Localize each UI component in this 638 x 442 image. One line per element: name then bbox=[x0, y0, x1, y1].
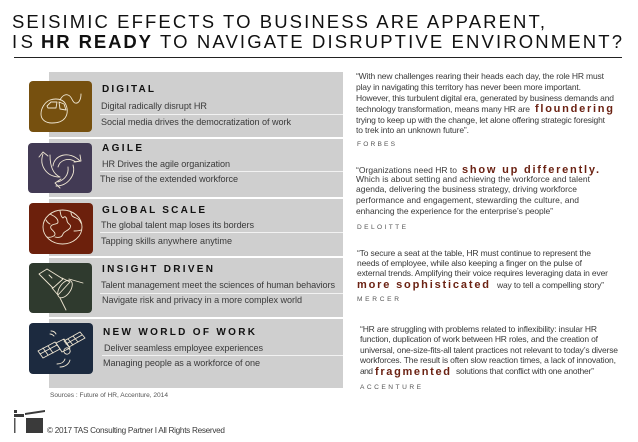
panel: agile bbox=[28, 139, 343, 197]
text: insight driven bbox=[101, 264, 335, 305]
text: global scale: GLOBAL SCALE bbox=[102, 205, 205, 216]
quote: mercer: more sophisticated bbox=[357, 279, 489, 291]
quote: mercer: “To secure a seat at the table, HR must continue to represent the bbox=[357, 248, 591, 258]
quote: forbes: technology transformation, means many HR are bbox=[356, 104, 530, 114]
panel: new world of work bbox=[29, 319, 343, 388]
text: global scale: The global talent map loses its borders bbox=[101, 220, 254, 230]
quote: deloitte: Which is about setting and achieving the workforce and talent bbox=[356, 174, 591, 184]
quote: forbes: to trek into an unknown future”. bbox=[356, 125, 469, 135]
quote: deloitte: agenda, delivering the business strategy, driving workforce bbox=[356, 184, 577, 194]
quote: forbes: play in navigating this territory has never been more important. bbox=[356, 82, 581, 92]
title: TO NAVIGATE DISRUPTIVE ENVIRONMENT? bbox=[160, 31, 622, 52]
icon: telescope bbox=[29, 263, 92, 313]
text: new world of work: NEW WORLD OF WORK bbox=[103, 327, 256, 338]
quote: accenture: and bbox=[360, 366, 373, 376]
text: agile: The rise of the extended workforce bbox=[100, 174, 238, 184]
panel: digital bbox=[29, 72, 343, 137]
quote: accenture: “HR are struggling with problems related to inflexibility: insular HR bbox=[360, 324, 597, 334]
quote: accenture: solutions that conflict with one another” bbox=[456, 366, 594, 376]
quote: accenture: workforces. The result is often slow reaction times, a lack of innovation, bbox=[359, 355, 616, 365]
quote: accenture: universal, one-size-fits-all talent practices not relevant to today’s diverse bbox=[360, 345, 618, 355]
text: agile bbox=[100, 143, 238, 184]
quote: mercer: external trends. Amplifying their voice requires leveraging data in ever bbox=[357, 268, 608, 278]
quote: mercer: way to tell a compelling story” bbox=[496, 280, 604, 290]
source note: Sources : Future of HR, Accenture, 2014 bbox=[50, 392, 168, 399]
quote: forbes bbox=[356, 71, 614, 148]
text: new world of work bbox=[103, 327, 263, 368]
icon: cycle arrows bbox=[28, 143, 92, 193]
panel: themes bbox=[28, 72, 343, 388]
title: HR READY bbox=[41, 31, 152, 52]
icon: satellite bbox=[29, 323, 93, 374]
logo bbox=[14, 410, 45, 433]
text: global scale bbox=[101, 205, 254, 246]
title: SEISIMIC EFFECTS TO BUSINESS ARE APPARENT, bbox=[12, 11, 545, 32]
text: digital: DIGITAL bbox=[102, 84, 154, 95]
footer: © 2017 TAS Consulting Partner I All Rights Reserved bbox=[47, 426, 225, 435]
text: digital bbox=[101, 84, 291, 127]
text: new world of work: Deliver seamless employee experiences bbox=[104, 343, 263, 353]
quote: deloitte: performance and engagement, stewarding the culture, and bbox=[356, 195, 579, 205]
quote: accenture: function, duplication of work between HR roles, and the creation of bbox=[360, 334, 599, 344]
text: new world of work: Managing people as a workforce of one bbox=[103, 358, 260, 368]
icon: mouse bbox=[29, 81, 92, 132]
text: digital: Social media drives the democratization of work bbox=[101, 117, 291, 127]
text: insight driven: Navigate risk and privacy in a more complex world bbox=[102, 295, 302, 305]
icon: globe bbox=[29, 203, 93, 254]
quote: deloitte: “Organizations need HR to bbox=[356, 165, 457, 175]
title bbox=[12, 11, 622, 52]
quote: forbes: However, this turbulent digital era, generated by business demands and bbox=[356, 93, 614, 103]
text: agile: AGILE bbox=[102, 143, 142, 154]
panel: insight driven bbox=[29, 258, 343, 317]
quote: forbes: “With new challenges rearing their heads each day, the role HR must bbox=[356, 71, 605, 81]
panel: global scale bbox=[29, 199, 343, 256]
title: IS bbox=[12, 31, 33, 52]
quote: mercer: needs of employee, while also keeping a finger on the pulse of bbox=[357, 258, 583, 268]
quote: forbes: FORBES bbox=[357, 141, 396, 148]
quote: deloitte: enhancing the experience for the enterprise’s people” bbox=[356, 206, 553, 216]
text: agile: HR Drives the agile organization bbox=[102, 159, 230, 169]
quote: mercer bbox=[357, 248, 608, 303]
quote: deloitte: DELOITTE bbox=[357, 224, 407, 231]
quote: forbes: trying to keep up with the change, let alone offering strategic foresight bbox=[356, 115, 606, 125]
text: digital: Digital radically disrupt HR bbox=[101, 101, 207, 111]
quote: accenture: ACCENTURE bbox=[360, 384, 422, 391]
quote: mercer: MERCER bbox=[357, 296, 399, 303]
text: global scale: Tapping skills anywhere anytime bbox=[101, 236, 232, 246]
text: insight driven: Talent management meet the sciences of human behaviors bbox=[101, 280, 335, 290]
quote: accenture bbox=[359, 324, 618, 391]
quote: accenture: fragmented bbox=[375, 366, 450, 378]
text: insight driven: INSIGHT DRIVEN bbox=[102, 264, 213, 275]
quote: forbes: floundering bbox=[535, 103, 613, 115]
quote: deloitte bbox=[356, 164, 599, 231]
quote: deloitte: show up differently. bbox=[462, 164, 599, 176]
